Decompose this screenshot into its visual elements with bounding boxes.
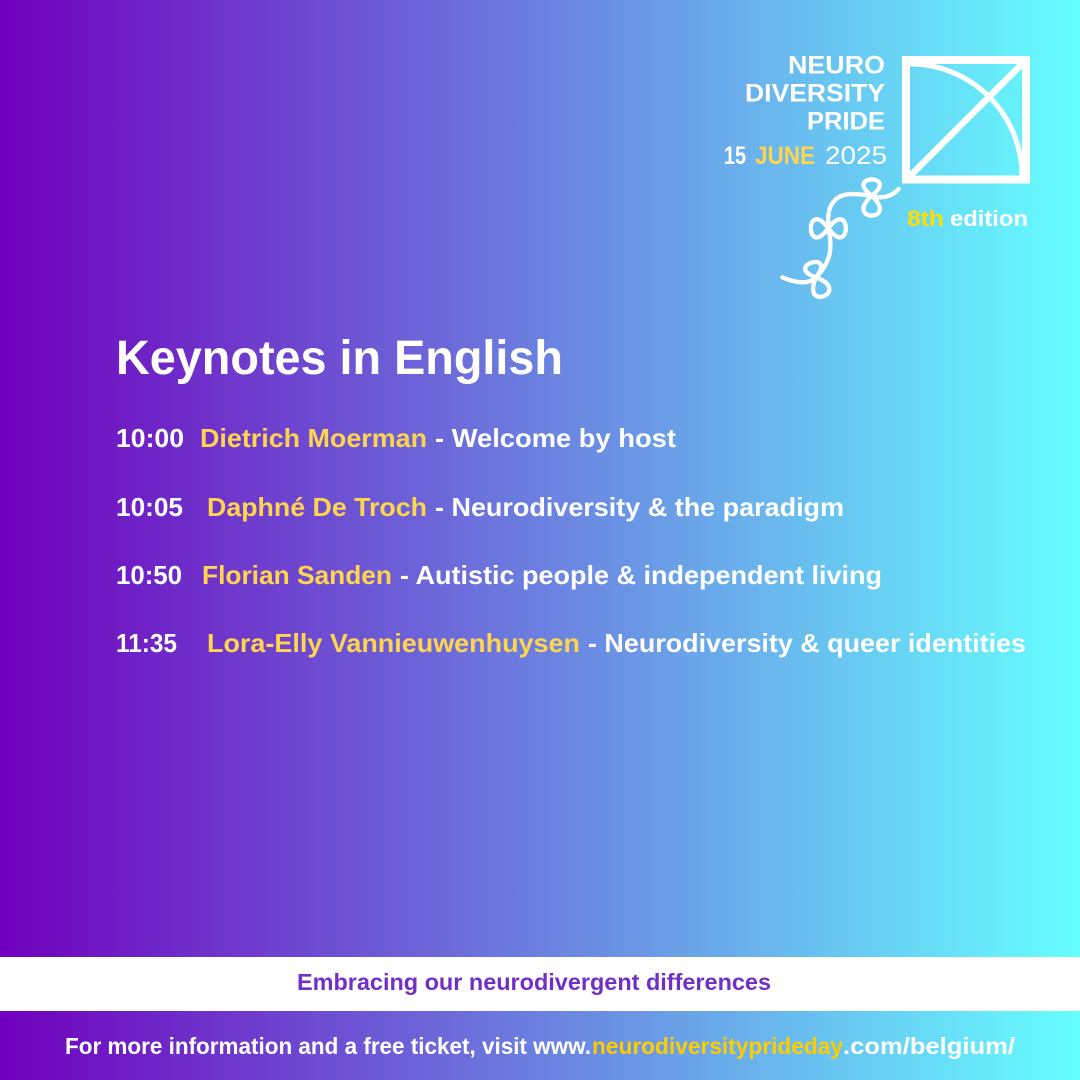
keynote row: 10:50: 10:50	[116, 560, 182, 590]
keynote row: 10:05: - Neurodiversity & the paradigm	[435, 492, 844, 522]
white tagline banner: Embracing our neurodivergent differences	[297, 969, 771, 995]
logo: looped ribbon	[782, 179, 899, 297]
logo: wordmark: DIVERSITY	[745, 80, 885, 108]
keynote row: 10:05	[116, 492, 844, 522]
logo: edition label: edition	[950, 206, 1028, 231]
logo: event date	[724, 142, 887, 170]
logo: wordmark	[745, 52, 885, 136]
footer band: For more information and a free ticket, visit www.	[65, 1033, 591, 1059]
keynote row: 10:50: Florian Sanden	[202, 560, 392, 590]
schedule list	[116, 423, 1026, 658]
logo: event date: 15	[724, 142, 746, 170]
title: Keynotes in English	[116, 332, 563, 385]
white tagline banner	[0, 957, 1080, 1011]
keynote row: 10:50	[116, 560, 882, 590]
keynote row: 11:35: 11:35	[116, 628, 177, 658]
logo: event date: JUNE	[755, 142, 815, 170]
logo: wordmark: NEURO	[788, 52, 885, 80]
keynote row: 10:00	[116, 423, 676, 453]
logo: square emblem	[906, 60, 1026, 180]
keynote row: 10:50: - Autistic people & independent living	[400, 560, 882, 590]
keynote row: 10:05: Daphné De Troch	[207, 492, 427, 522]
keynote row: 10:00: Dietrich Moerman	[200, 423, 427, 453]
keynote row: 10:00: - Welcome by host	[435, 423, 676, 453]
logo: edition label: 8th	[907, 206, 944, 231]
footer band	[0, 1011, 1080, 1080]
keynote row: 11:35: - Neurodiversity & queer identities	[588, 628, 1026, 658]
footer band: neurodiversityprideday	[592, 1033, 843, 1059]
keynote row: 10:05: 10:05	[116, 492, 183, 522]
keynote row: 11:35: Lora-Elly Vannieuwenhuysen	[207, 628, 580, 658]
keynote row: 10:00: 10:00	[116, 423, 184, 453]
logo: wordmark: PRIDE	[807, 108, 885, 136]
footer band: .com/belgium/	[843, 1033, 1016, 1059]
logo: event date: 2025	[825, 142, 887, 170]
keynote row: 11:35	[116, 628, 1026, 658]
logo: edition label	[907, 206, 1028, 231]
